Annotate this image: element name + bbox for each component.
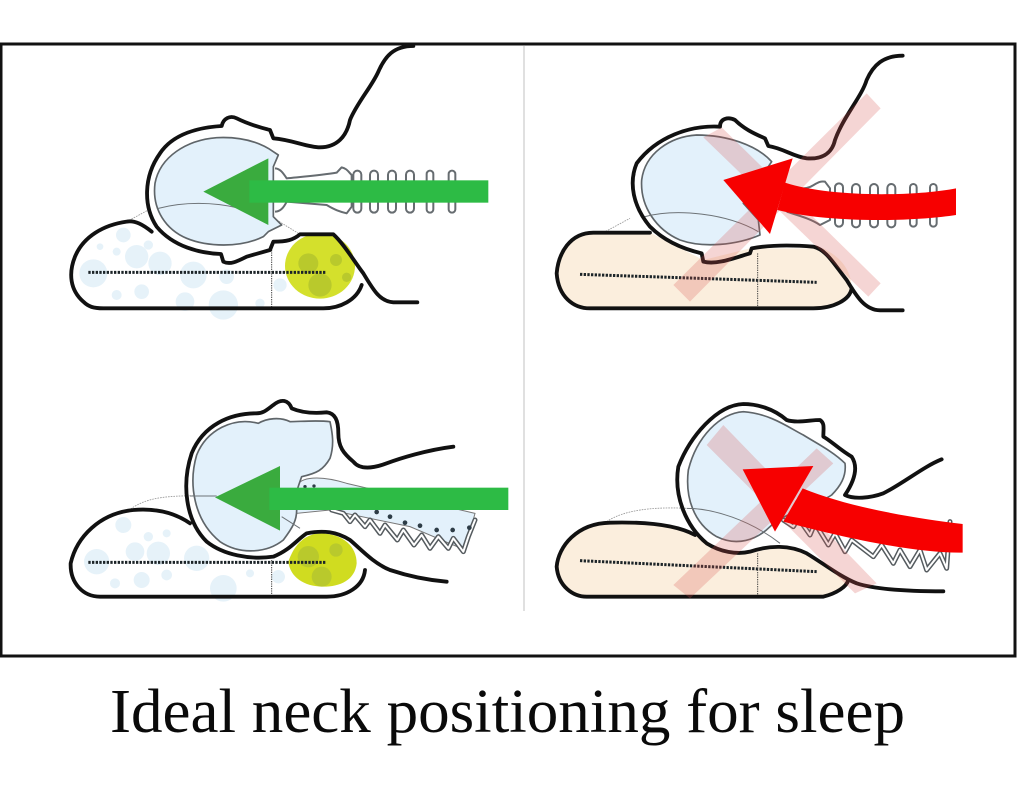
pillow with yellow support: [71, 210, 363, 320]
title: Ideal neck positioning for sleep: [110, 678, 905, 746]
panel: correct neck position, side sleeping: [71, 401, 508, 602]
outer frame: [1, 44, 1015, 656]
panel: incorrect neck position, side sleeping: [557, 404, 963, 598]
skull: [642, 135, 772, 245]
pillow: [557, 218, 852, 308]
head and body outline: [633, 56, 903, 310]
skull: [190, 419, 333, 551]
pillow: [557, 508, 848, 597]
pale red cross: [673, 93, 881, 302]
head and body outline: [186, 401, 453, 582]
pillow with yellow support: [71, 496, 365, 602]
red curved arrow: [723, 158, 956, 234]
panel: correct neck position, back sleeping: [71, 46, 488, 320]
red curved arrow: [743, 466, 963, 553]
spine vertebrae: [787, 181, 937, 227]
skull: [687, 412, 845, 543]
spine with zig-zag vertebrae: [297, 478, 475, 552]
spine with zig-zag vertebrae: [783, 518, 950, 570]
pale red cross: [673, 425, 877, 598]
head and body outline: [147, 46, 417, 302]
head and body outline: [677, 404, 943, 591]
green arrow: [215, 466, 508, 531]
green arrow: [203, 158, 488, 225]
spine vertebrae: [275, 167, 455, 213]
skull: [155, 137, 282, 245]
panel: incorrect neck position, back sleeping: [557, 56, 956, 310]
